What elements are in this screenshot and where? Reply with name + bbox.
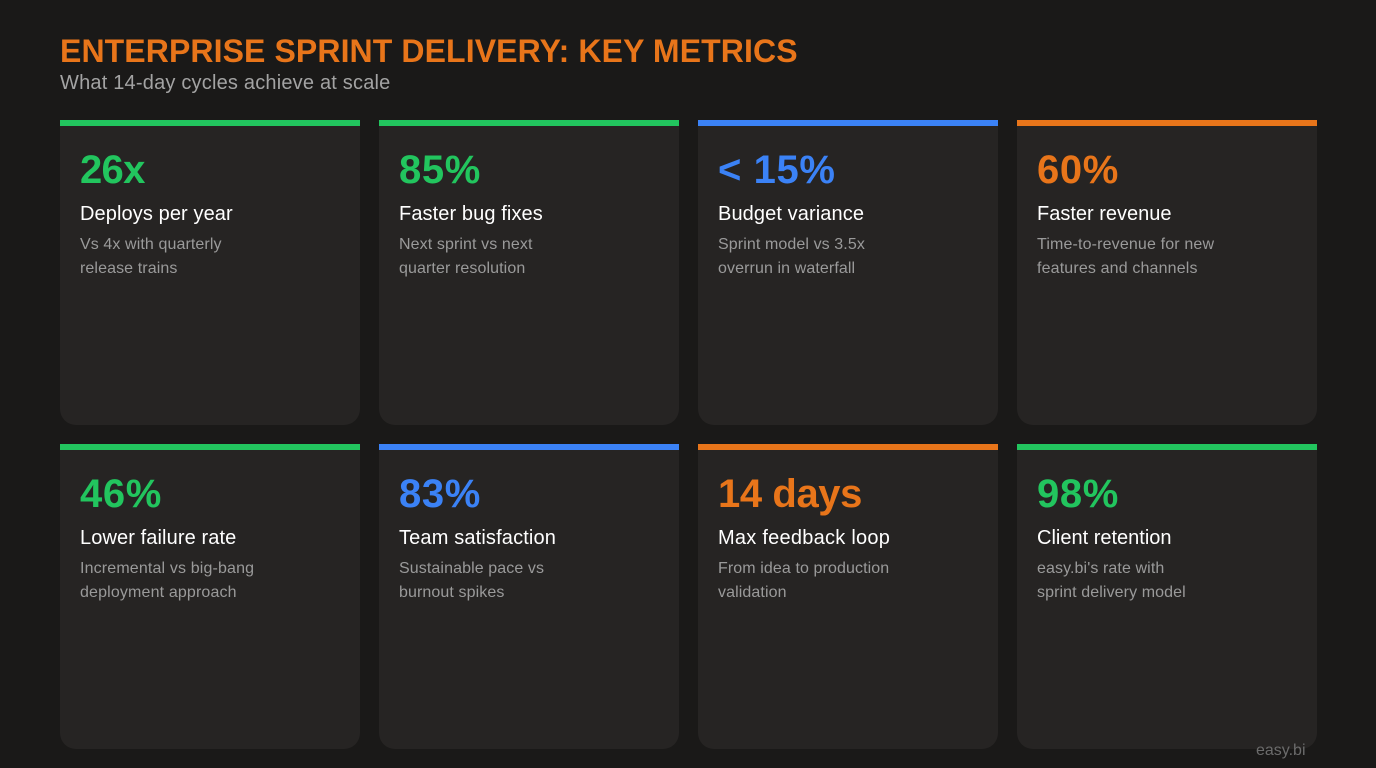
panel: faster bug fixes: quarter resolution [399,260,525,277]
brand label: easy.bi [1256,742,1306,759]
panel: faster bug fixes [379,120,679,425]
panel: faster bug fixes: Next sprint vs next [399,236,533,253]
panel: team satisfaction: 83% [399,472,481,516]
panel: budget variance: overrun in waterfall [718,260,855,277]
panel: max feedback loop: validation [718,584,787,601]
panel: budget variance: Sprint model vs 3.5x [718,236,865,253]
panel: budget variance [698,120,998,425]
panel: max feedback loop [698,444,998,749]
panel: budget variance: < 15% [718,148,836,192]
panel: faster bug fixes: 85% [399,148,481,192]
panel: faster revenue [1017,120,1317,425]
panel: team satisfaction: burnout spikes [399,584,504,601]
panel: client retention: Client retention [1037,527,1172,549]
panel: team satisfaction: Sustainable pace vs [399,560,544,577]
panel: faster revenue: 60% [1037,148,1119,192]
panel: faster revenue: Faster revenue [1037,203,1172,225]
panel: max feedback loop: Max feedback loop [718,527,890,549]
panel: deploys per year: release trains [80,260,177,277]
panel: client retention: 98% [1037,472,1119,516]
panel: faster revenue: features and channels [1037,260,1198,277]
panel: lower failure rate [60,444,360,749]
panel: max feedback loop: From idea to production [718,560,889,577]
subtitle: What 14-day cycles achieve at scale [60,72,390,94]
panel: lower failure rate: 46% [80,472,162,516]
panel: client retention: easy.bi's rate with [1037,560,1164,577]
panel: faster bug fixes: Faster bug fixes [399,203,543,225]
title: ENTERPRISE SPRINT DELIVERY: KEY METRICS [60,33,798,69]
panel: lower failure rate: Incremental vs big-bang [80,560,254,577]
panel: client retention: sprint delivery model [1037,584,1186,601]
panel: faster revenue: Time-to-revenue for new [1037,236,1214,253]
panel: deploys per year: Deploys per year [80,203,233,225]
panel: client retention [1017,444,1317,749]
panel: lower failure rate: Lower failure rate [80,527,236,549]
panel: deploys per year [60,120,360,425]
panel: deploys per year: 26x [80,148,145,192]
panel: budget variance: Budget variance [718,203,864,225]
panel: team satisfaction: Team satisfaction [399,527,556,549]
panel: team satisfaction [379,444,679,749]
panel: lower failure rate: deployment approach [80,584,237,601]
panel: deploys per year: Vs 4x with quarterly [80,236,222,253]
panel: max feedback loop: 14 days [718,472,862,516]
